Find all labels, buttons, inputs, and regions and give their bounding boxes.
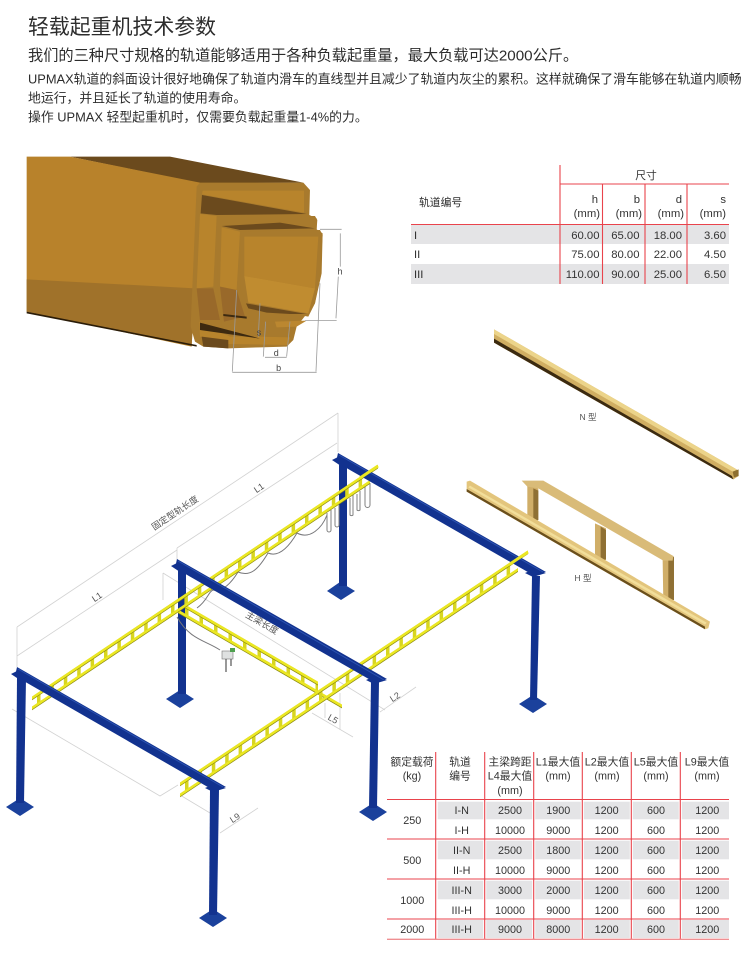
crane specification table: 8000 — [546, 924, 570, 936]
track cross-section illustration: b — [276, 363, 281, 373]
H-type label: H 型 — [574, 573, 592, 583]
track dimension table: 110.00 — [566, 269, 600, 281]
crane specification table: 1200 — [695, 905, 719, 917]
crane specification table: (mm) — [497, 785, 523, 797]
crane specification table: I-H — [454, 825, 469, 837]
crane specification table: 1200 — [595, 865, 619, 877]
track dimension table: (mm) — [574, 208, 600, 220]
track dimension table: 60.00 — [571, 230, 600, 242]
crane specification table: 600 — [647, 845, 665, 857]
dimension labels: L1 — [252, 481, 266, 495]
dimension labels: L9 — [228, 811, 242, 825]
track dimension table: 3.60 — [704, 230, 726, 242]
track dimension table: III — [414, 269, 423, 281]
track dimension table: 65.00 — [611, 230, 640, 242]
crane specification table: 1200 — [595, 885, 619, 897]
track dimension table: 轨道编号 — [419, 195, 462, 209]
track cross-section illustration: s — [257, 328, 262, 338]
crane specification table: L1最大值 — [536, 754, 580, 768]
crane specification table: 1200 — [695, 845, 719, 857]
track cross-section illustration: d — [274, 348, 279, 358]
crane specification table — [387, 752, 729, 939]
crane specification table: 600 — [647, 924, 665, 936]
yellow left runway — [32, 466, 378, 708]
yellow right runway — [180, 552, 528, 796]
crane specification table: III-H — [451, 924, 472, 936]
festoon loops — [327, 483, 370, 532]
crane specification table: L2最大值 — [585, 754, 629, 768]
track dimension table: 18.00 — [654, 230, 682, 242]
crane specification table: 1200 — [695, 865, 719, 877]
intro text block — [28, 72, 742, 124]
crane specification table: (kg) — [403, 770, 421, 782]
crane specification table: 1200 — [695, 825, 719, 837]
crane specification table: II-N — [453, 845, 470, 857]
crane specification table: (mm) — [694, 770, 720, 782]
crane specification table: L9最大值 — [685, 754, 729, 768]
runway ends above beams — [360, 466, 528, 564]
track dimension table: d — [676, 194, 682, 206]
track dimension table: II — [414, 249, 420, 261]
crane specification table: 600 — [647, 865, 665, 877]
crane specification table: 10000 — [495, 905, 525, 917]
crane specification table: 2500 — [498, 805, 522, 817]
crane specification table: 2000 — [400, 924, 424, 936]
dimension labels: L5 — [326, 712, 340, 726]
crane specification table: L5最大值 — [634, 754, 678, 768]
crane specification table: 1200 — [695, 805, 719, 817]
crane specification table: 2000 — [546, 885, 570, 897]
track dimension table: 90.00 — [611, 269, 640, 281]
crane specification table: 9000 — [546, 825, 570, 837]
dimension labels — [90, 481, 402, 825]
crane specification table: 1200 — [695, 885, 719, 897]
track dimension table: h — [592, 194, 598, 206]
track dimension table: 4.50 — [704, 249, 726, 261]
track dimension table: b — [634, 194, 640, 206]
track dimension table: 25.00 — [654, 269, 682, 281]
rear and middle columns — [166, 462, 355, 708]
intro text block: 地运行，并且延长了轨道的使用寿命。 — [28, 90, 246, 106]
track dimension table: (mm) — [616, 208, 642, 220]
subtitle: 我们的三种尺寸规格的轨道能够适用于各种负载起重量，最大负载可达2000公斤。 — [28, 48, 578, 64]
crane specification table: II-H — [453, 865, 470, 877]
N-type track — [494, 329, 739, 479]
yellow main beam — [178, 602, 342, 707]
crane specification table: 1200 — [695, 924, 719, 936]
crane specification table: 轨道 — [449, 754, 471, 768]
H-type track — [467, 481, 710, 629]
crane specification table: 编号 — [449, 768, 471, 782]
track cross-section illustration — [27, 157, 342, 373]
crane specification table: 2500 — [498, 845, 522, 857]
dimension labels: 主梁长度 — [244, 609, 281, 636]
crane specification table: 10000 — [495, 865, 525, 877]
crane specification table: (mm) — [643, 770, 669, 782]
crane specification table: 9000 — [546, 865, 570, 877]
crane system illustration — [6, 413, 547, 927]
festoon cable — [177, 515, 327, 650]
track dimension table: 22.00 — [654, 249, 682, 261]
front columns and right columns — [6, 576, 547, 927]
dimension labels: 固定型轨长度 — [149, 493, 200, 532]
crane specification table: 额定载荷 — [390, 754, 434, 768]
crane specification table: 1000 — [400, 895, 424, 907]
crane specification table: 9000 — [498, 924, 522, 936]
intro text block: 操作 UPMAX 轻型起重机时，仅需要负载起重量1-4%的力。 — [28, 110, 368, 124]
track dimension table: 尺寸 — [635, 168, 657, 182]
track dimension table: 6.50 — [704, 269, 726, 281]
dimension labels: L2 — [388, 690, 402, 704]
crane specification table: 600 — [647, 805, 665, 817]
crane specification table: 500 — [403, 855, 421, 867]
track dimension table — [411, 165, 729, 284]
track dimension table: s — [720, 194, 726, 206]
track dimension table: (mm) — [700, 208, 726, 220]
crane specification table: 10000 — [495, 825, 525, 837]
N-type label: N 型 — [579, 412, 597, 422]
hoist — [222, 648, 235, 672]
crane specification table: L4最大值 — [488, 768, 532, 782]
crane specification table: 1200 — [595, 845, 619, 857]
crane specification table: 1200 — [595, 805, 619, 817]
crane specification table: 1900 — [546, 805, 570, 817]
crane specification table: 9000 — [546, 905, 570, 917]
intro text block: UPMAX轨道的斜面设计很好地确保了轨道内滑车的直线型并且减少了轨道内灰尘的累积。这样就确保了滑车能够在轨道内顺畅 — [28, 72, 742, 86]
crane specification table: 250 — [403, 815, 421, 827]
crane specification table: 600 — [647, 905, 665, 917]
crane specification table: III-N — [451, 885, 472, 897]
crane specification table: 主梁跨距 — [488, 754, 532, 768]
track dimension table: I — [414, 230, 417, 242]
crane specification table: I-N — [454, 805, 469, 817]
track dimension table: (mm) — [658, 208, 684, 220]
crane specification table: 600 — [647, 885, 665, 897]
crane specification table: 3000 — [498, 885, 522, 897]
crane specification table: III-H — [451, 905, 472, 917]
track cross-section illustration: h — [337, 267, 342, 277]
track dimension table: 75.00 — [571, 249, 600, 261]
crane specification table: 1200 — [595, 825, 619, 837]
track dimension table: 80.00 — [611, 249, 640, 261]
crane specification table: (mm) — [594, 770, 620, 782]
blue bridge beams — [11, 453, 546, 792]
crane specification table: 1200 — [595, 924, 619, 936]
crane specification table: (mm) — [545, 770, 571, 782]
title: 轻载起重机技术参数 — [28, 16, 216, 39]
dimension labels: L1 — [90, 590, 104, 604]
dimension lines — [12, 413, 416, 833]
crane specification table: 1800 — [546, 845, 570, 857]
crane specification table: 1200 — [595, 905, 619, 917]
crane specification table: 600 — [647, 825, 665, 837]
